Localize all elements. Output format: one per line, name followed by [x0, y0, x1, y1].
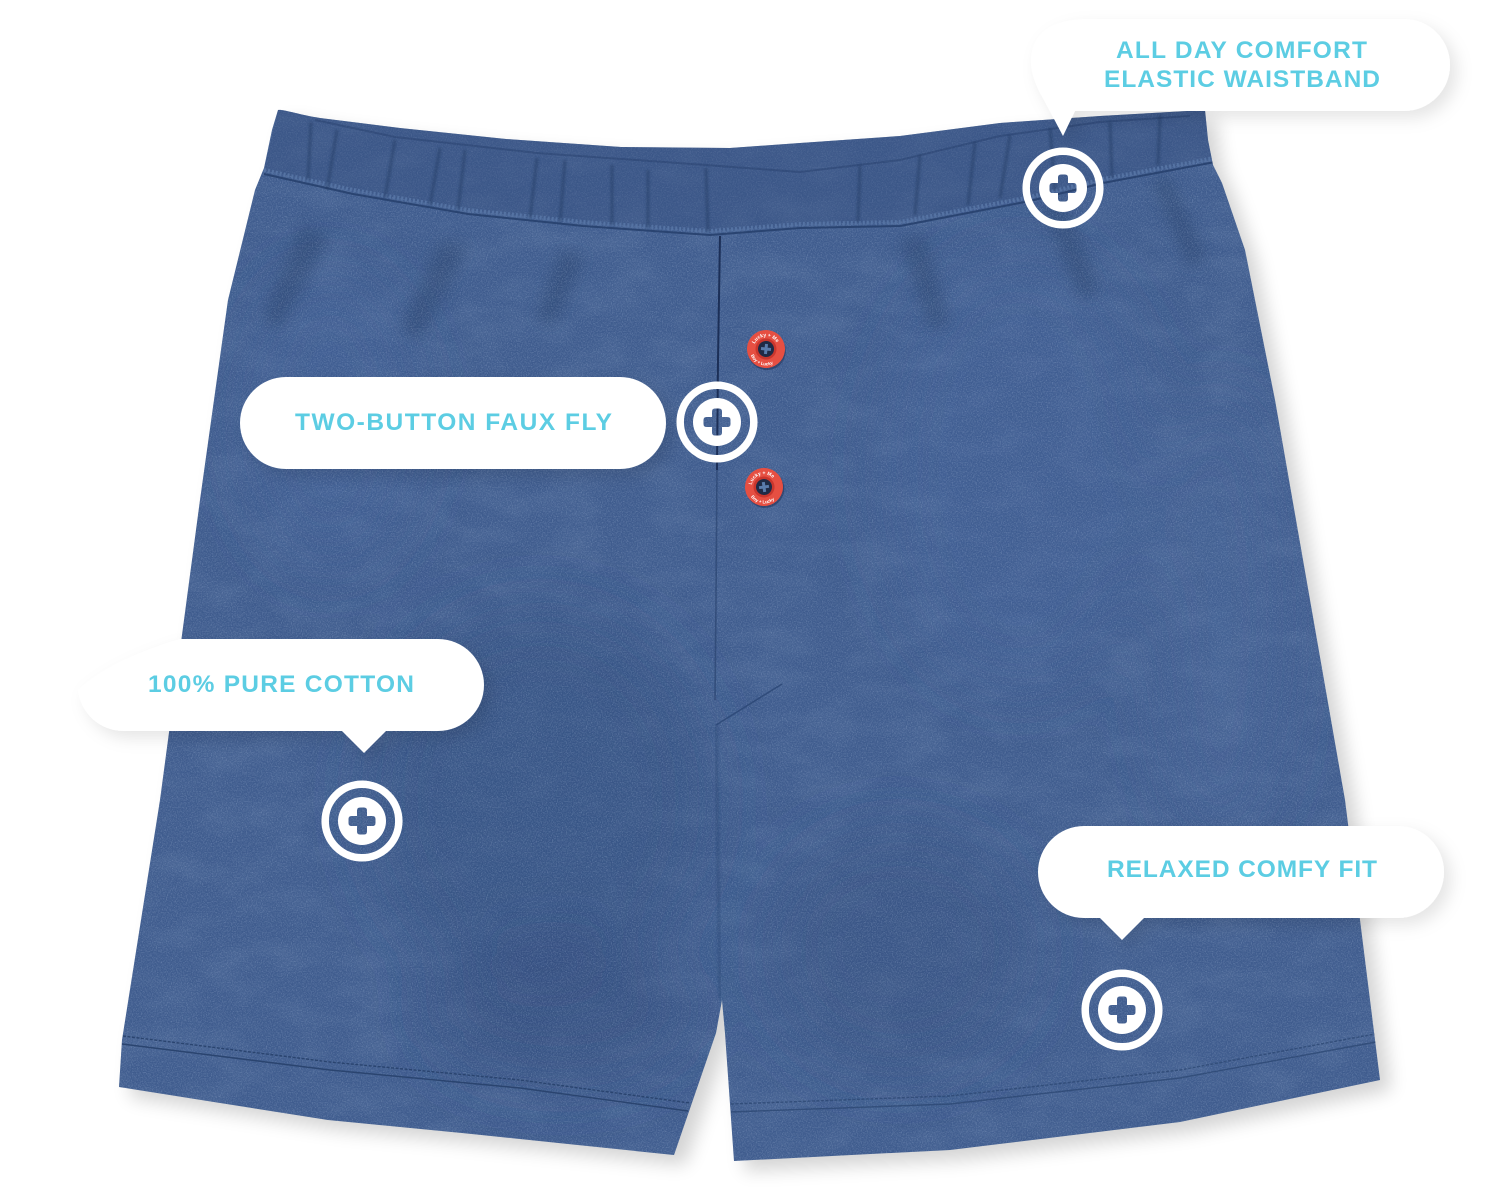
button: lower: Lucky + Me — [748, 472, 774, 484]
callout: faux fly — [240, 377, 666, 469]
button: upper — [747, 330, 786, 370]
waistband — [264, 110, 1215, 235]
icon: plus marker cotton — [325, 784, 399, 858]
callout: elastic waistband — [1031, 19, 1450, 136]
fly placket and stitching — [715, 236, 782, 1000]
callout: relaxed fit — [1038, 826, 1444, 940]
button: lower — [745, 468, 784, 508]
button: upper: Lucky + Me — [752, 334, 778, 344]
icon: plus marker waistband — [1026, 151, 1100, 225]
icon: plus marker fit — [1085, 973, 1159, 1047]
callout: elastic waistband: ALL DAY COMFORT — [1116, 37, 1367, 64]
button: upper: Boy + Lucky — [750, 354, 772, 366]
callout: faux fly: TWO-BUTTON FAUX FLY — [295, 409, 612, 436]
button: lower: Boy + Lucky — [751, 495, 774, 504]
icon: plus marker fly — [680, 385, 754, 459]
callout: pure cotton — [78, 639, 484, 753]
hem stitching — [122, 1034, 1376, 1112]
callout: pure cotton: 100% PURE COTTON — [148, 671, 414, 698]
shorts garment — [100, 100, 1400, 1171]
callout: elastic waistband: ELASTIC WAISTBAND — [1104, 66, 1380, 93]
callout: relaxed fit: RELAXED COMFY FIT — [1107, 856, 1377, 883]
